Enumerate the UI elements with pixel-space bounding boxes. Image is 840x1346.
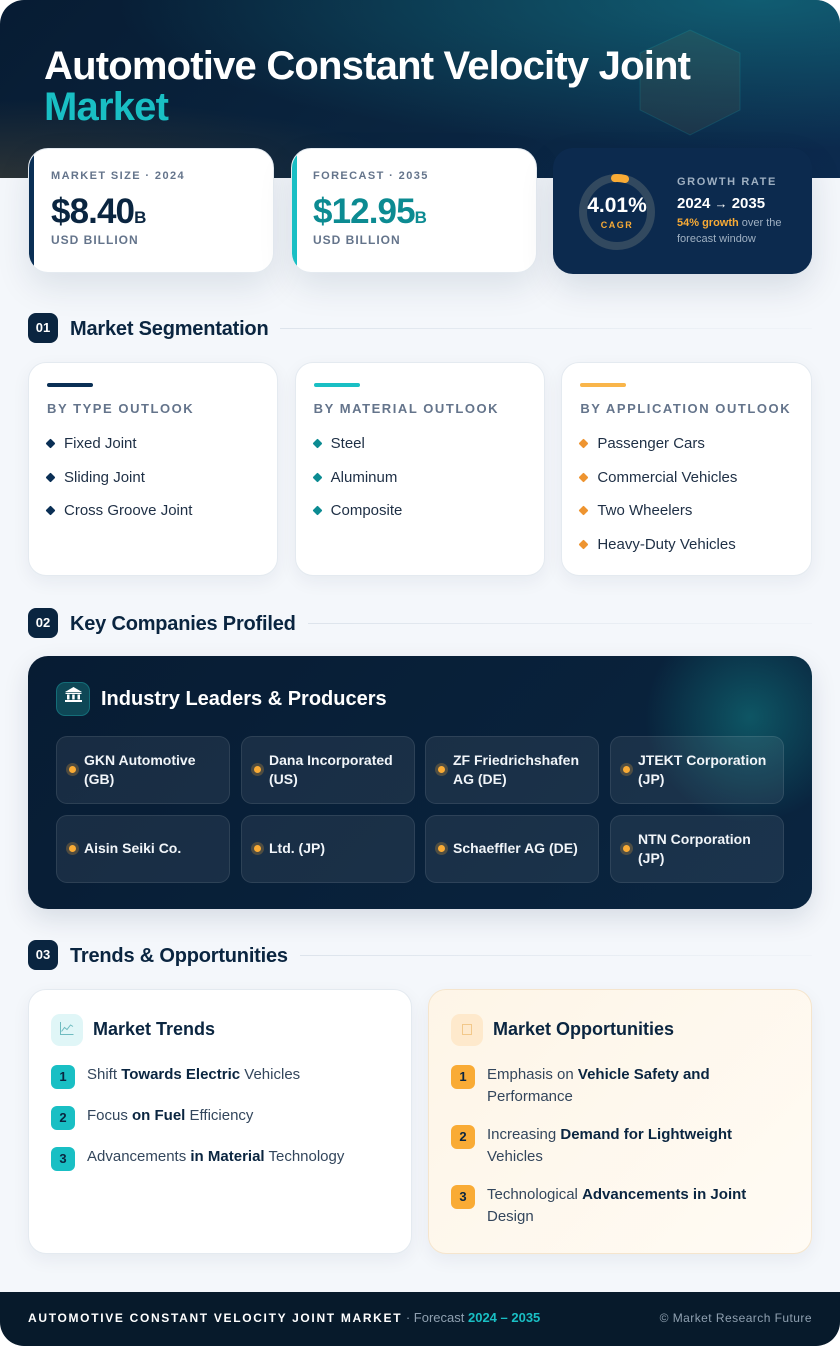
panel: by type outlook: BY TYPE OUTLOOK: [47, 401, 194, 416]
opportunity 3: 3: [459, 1189, 467, 1204]
opportunity 1: 1: [459, 1069, 467, 1084]
stat card: forecast 2035: [291, 148, 537, 273]
trend 3: 3: [59, 1151, 67, 1166]
stat card: forecast 2035: FORECAST · 2035: [313, 170, 429, 182]
section heading: key companies: [28, 608, 714, 638]
company: Schaeffler: [425, 815, 599, 883]
trend 2: [51, 1106, 75, 1130]
company: NTN: [610, 815, 784, 883]
growth note: forecast window: [677, 233, 756, 245]
company: Aisin: Aisin Seiki Co.: [84, 840, 181, 856]
company: Schaeffler: Schaeffler AG (DE): [453, 840, 578, 856]
panel: market opportunities: Design: [487, 1208, 534, 1225]
company: Aisin: [56, 815, 230, 883]
section heading: market segmentation: Market Segmentation: [70, 318, 268, 340]
title: [44, 44, 690, 129]
panel: by application outlook: Two Wheelers: [597, 502, 692, 519]
company: Dana: Dana Incorporated (US): [269, 752, 393, 786]
opportunity 2: 2: [459, 1129, 467, 1144]
company: Dana: [241, 736, 415, 804]
footer title: AUTOMOTIVE CONSTANT VELOCITY JOINT MARKET · Forecast 2024 – 2035: [28, 1310, 540, 1325]
panel: by material outlook: BY MATERIAL OUTLOOK: [314, 401, 499, 416]
panel: market opportunities: Performance: [487, 1088, 573, 1105]
card heading: Market Opportunities: [493, 1019, 674, 1039]
panel: market trends: [28, 989, 412, 1254]
panel: by type outlook: Fixed Joint: [64, 435, 137, 452]
stat card: forecast 2035: USD BILLION: [313, 233, 401, 247]
trend 3: [51, 1147, 75, 1171]
icon: decorative hexagon: [640, 30, 740, 136]
company: Ltd: [241, 815, 415, 883]
panel: market opportunities: Increasing Demand for Lightweight: [487, 1126, 732, 1142]
panel: by material outlook: Steel: [331, 435, 365, 452]
company: JTEKT: [610, 736, 784, 804]
panel: by material outlook: [295, 362, 545, 576]
stat card: market size 2024: $8.40B: [51, 192, 146, 231]
title: Automotive Constant Velocity Joint: [44, 44, 690, 88]
panel: by material outlook: Aluminum: [331, 469, 397, 486]
trend 1: 1: [59, 1069, 67, 1084]
trend 2: 2: [59, 1110, 67, 1125]
icon: classical building: [56, 682, 90, 716]
growth note: 54% growth over the: [677, 217, 782, 229]
section heading: trends and opportunities: [28, 940, 716, 970]
company: NTN: NTN Corporation (JP): [638, 830, 751, 866]
panel: by type outlook: Cross Groove Joint: [64, 502, 192, 519]
trend 1: [51, 1065, 75, 1089]
panel: by type outlook: [28, 362, 278, 576]
CAGR label: CAGR: [601, 220, 633, 230]
panel: by application outlook: BY APPLICATION OUTLOOK: [580, 401, 791, 416]
growth note: [677, 217, 782, 245]
panel: industry leaders: [28, 656, 812, 909]
stat card: forecast 2035: $12.95B: [313, 192, 427, 231]
icon: missing glyph box: [451, 1014, 483, 1046]
stat card: market size 2024: [28, 148, 274, 273]
footer: [0, 1292, 840, 1346]
opportunity 2: [451, 1125, 475, 1149]
card heading: Market Trends: [93, 1019, 215, 1039]
panel: market opportunities: [428, 989, 812, 1254]
panel: market opportunities: Technological Advancements in Joint: [487, 1186, 746, 1202]
chart: CAGR donut ring: [579, 174, 655, 250]
opportunity 1: [451, 1065, 475, 1089]
panel: market trends: Shift Towards Electric Vehicles: [87, 1066, 300, 1082]
CAGR value: 4.01%: [587, 194, 647, 217]
company: GKN: [56, 736, 230, 804]
panel: market trends: Advancements in Material Technology: [87, 1148, 344, 1164]
company: ZF: [425, 736, 599, 804]
panel: market trends: Focus on Fuel Efficiency: [87, 1106, 253, 1124]
company: Ltd: Ltd. (JP): [269, 840, 325, 856]
stat card: market size 2024: MARKET SIZE · 2024: [51, 170, 185, 182]
header banner: [0, 0, 840, 178]
panel: by application outlook: Passenger Cars: [597, 435, 705, 452]
panel: by application outlook: [561, 362, 812, 576]
panel heading: Industry Leaders & Producers: [101, 688, 387, 710]
title: Market: [44, 85, 168, 129]
company: GKN: GKN Automotive (GB): [84, 752, 195, 786]
section heading: key companies: 02: [36, 615, 50, 630]
panel: by material outlook: Composite: [331, 502, 402, 519]
section heading: trends and opportunities: Trends & Opportunities: [70, 945, 288, 967]
footer credit: © Market Research Future: [660, 1311, 812, 1325]
opportunity 3: [451, 1185, 475, 1209]
icon: line chart: [51, 1014, 83, 1046]
section heading: market segmentation: [28, 313, 712, 343]
section heading: key companies: Key Companies Profiled: [70, 613, 296, 635]
panel: by application outlook: Heavy-Duty Vehicles: [597, 536, 736, 553]
panel: market opportunities: Emphasis on Vehicle Safety and: [487, 1066, 710, 1082]
panel: market opportunities: Vehicles: [487, 1148, 543, 1165]
stat card: market size 2024: USD BILLION: [51, 233, 139, 247]
section heading: trends and opportunities: 03: [36, 947, 50, 962]
growth years: 2024 → 2035: [677, 195, 765, 212]
growth rate label: GROWTH RATE: [677, 176, 777, 188]
section heading: market segmentation: 01: [36, 320, 50, 335]
company: ZF: ZF Friedrichshafen AG (DE): [453, 752, 579, 786]
panel: by type outlook: Sliding Joint: [64, 469, 145, 486]
company: JTEKT: JTEKT Corporation (JP): [638, 752, 766, 786]
panel: by application outlook: Commercial Vehicles: [597, 469, 737, 486]
stat card: CAGR growth rate: [553, 148, 812, 274]
